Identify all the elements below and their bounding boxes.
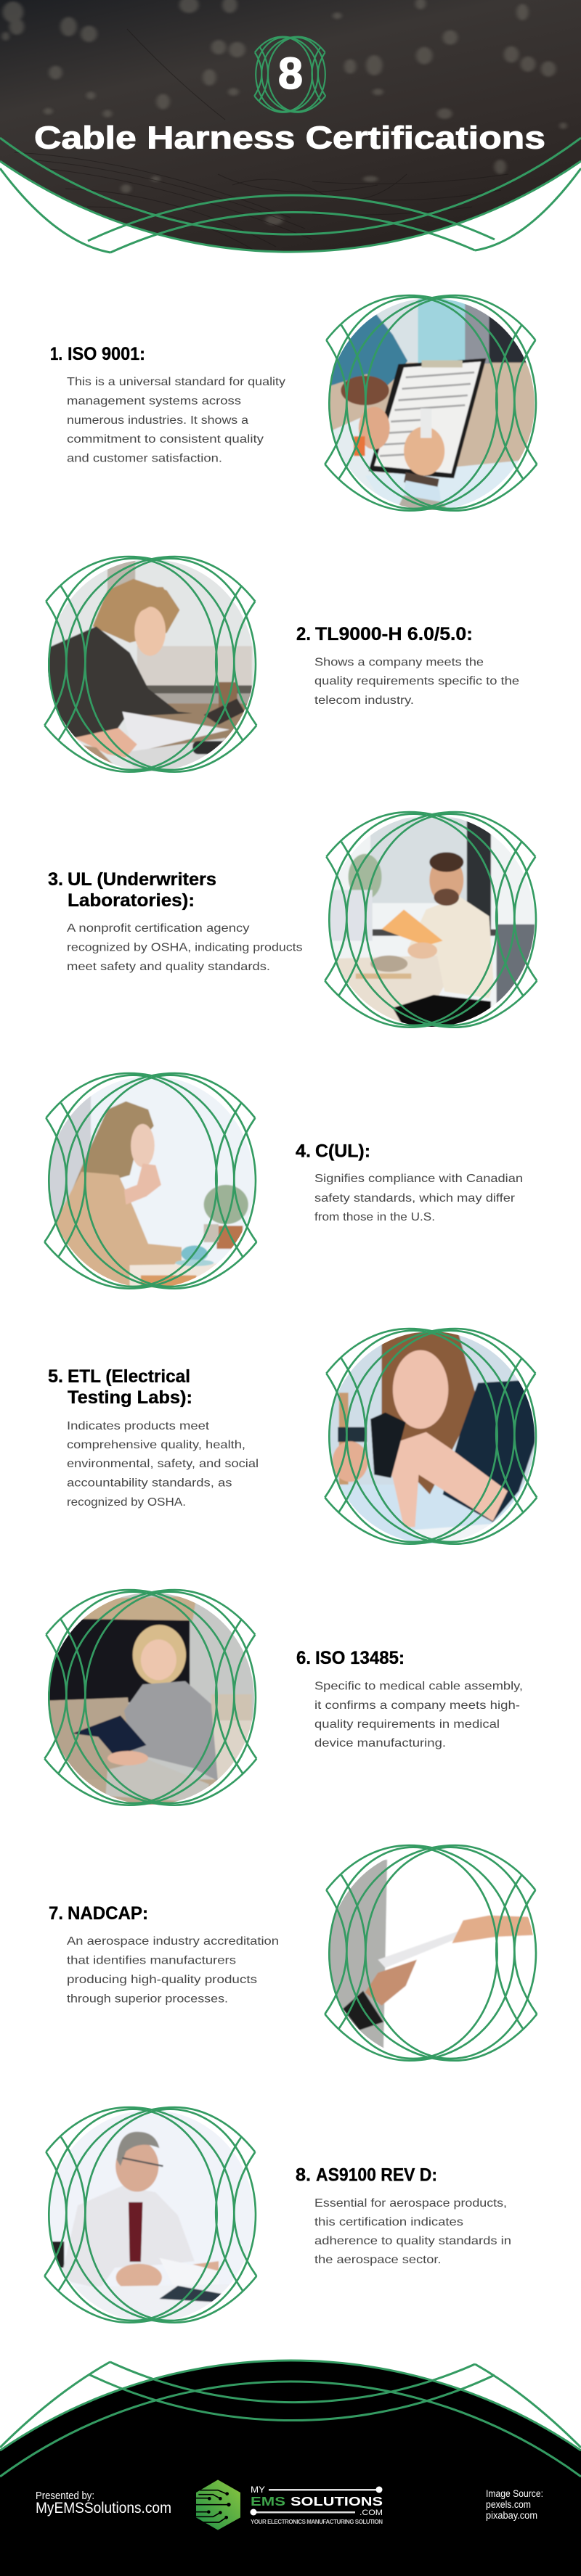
heading: 1. <box>50 344 62 364</box>
image source: pexels.com <box>486 2499 531 2510</box>
heading: 8. <box>296 2165 311 2186</box>
title number: 8 <box>278 49 303 98</box>
heading: Laboratories): <box>68 890 195 911</box>
text block: Indicates products meet <box>67 1420 210 1432</box>
text block: numerous industries. It shows a <box>67 414 248 427</box>
text block <box>67 376 285 464</box>
text block: telecom industry. <box>314 694 414 707</box>
photo: hands passing document <box>328 1859 533 2048</box>
panel: footer <box>0 2360 581 2576</box>
icon: green motif <box>44 1073 256 1289</box>
heading: 4. <box>296 1141 311 1162</box>
text block <box>314 1173 523 1223</box>
presented by <box>36 2490 171 2516</box>
presented by: Presented by: <box>36 2490 94 2502</box>
logo wordmark: MY <box>251 2485 265 2495</box>
text block: accountability standards, as <box>67 1477 232 1489</box>
text block: quality requirements specific to the <box>314 676 519 688</box>
icon: green motif <box>44 2107 256 2323</box>
footer black arc background <box>0 2360 581 2576</box>
text block: the aerospace sector. <box>314 2254 442 2266</box>
icon: green motif <box>325 1329 537 1544</box>
text block: Signifies compliance with Canadian <box>314 1173 523 1185</box>
heading: UL (Underwriters <box>68 869 216 890</box>
text block: safety standards, which may differ <box>314 1192 516 1205</box>
text block <box>67 922 302 973</box>
text block: producing high-quality products <box>67 1974 257 1986</box>
header green arcs <box>0 138 581 253</box>
icon: green motif <box>44 557 256 772</box>
icon: header motif <box>254 37 325 112</box>
text block: through superior processes. <box>67 1993 228 2006</box>
panel: item 7 NADCAP <box>49 1842 541 2071</box>
photo: woman thinking at desk <box>48 1077 254 1288</box>
logo <box>196 2479 383 2530</box>
text block: Shows a company meets the <box>314 656 484 669</box>
text block <box>67 1420 259 1509</box>
heading: C(UL): <box>315 1141 370 1162</box>
image source: pixabay.com <box>486 2510 537 2521</box>
presented by: MyEMSSolutions.com <box>36 2500 171 2516</box>
heading: Testing Labs): <box>68 1387 192 1408</box>
text block: device manufacturing. <box>314 1737 446 1750</box>
panel: item 2 TL9000 <box>41 551 519 780</box>
panel: item 8 AS9100 <box>41 2104 511 2333</box>
panel: item 5 ETL <box>48 1324 541 1554</box>
heading: ISO 13485: <box>315 1648 405 1668</box>
text block: management systems across <box>67 395 241 408</box>
text block: this certification indicates <box>314 2216 463 2228</box>
heading: ETL (Electrical <box>68 1366 190 1387</box>
text block: it confirms a company meets high- <box>314 1699 520 1712</box>
panel: header <box>0 0 581 261</box>
logo wordmark: EMS <box>251 2494 285 2509</box>
heading: 2. <box>296 624 311 644</box>
text block <box>314 2197 511 2266</box>
heading: ISO 9001: <box>68 344 145 364</box>
logo wordmark <box>250 2485 383 2525</box>
text block: recognized by OSHA. <box>67 1496 186 1509</box>
text block: Essential for aerospace products, <box>314 2197 507 2210</box>
text block: An aerospace industry accreditation <box>67 1935 279 1948</box>
icon: circuit hexagon <box>196 2479 240 2530</box>
image source: Image Source: <box>486 2488 543 2499</box>
icon: green motif <box>325 1845 537 2061</box>
heading: AS9100 REV D: <box>316 2165 437 2186</box>
text block: from those in the U.S. <box>314 1211 435 1223</box>
heading: 7. <box>49 1903 63 1924</box>
title: Cable Harness Certifications <box>34 120 545 155</box>
text block: Specific to medical cable assembly, <box>314 1681 523 1693</box>
heading: NADCAP: <box>68 1903 148 1924</box>
photo: clipboard and document <box>328 299 535 510</box>
text block: comprehensive quality, health, <box>67 1439 245 1451</box>
text block <box>314 1681 523 1750</box>
text block: that identifies manufacturers <box>67 1955 236 1966</box>
header photo background with bokeh <box>0 0 581 261</box>
heading <box>48 869 216 911</box>
panel: item 3 UL <box>48 808 541 1038</box>
panel: item 6 ISO 13485 <box>41 1586 523 1818</box>
text block: environmental, safety, and social <box>67 1458 259 1470</box>
text block: recognized by OSHA, indicating products <box>67 942 302 953</box>
text block: A nonprofit certification agency <box>67 922 250 935</box>
text block <box>67 1935 279 2006</box>
logo wordmark: SOLUTIONS <box>290 2494 383 2509</box>
text block: adherence to quality standards in <box>314 2235 511 2247</box>
photo: woman reading papers <box>48 560 254 771</box>
text block: quality requirements in medical <box>314 1718 500 1731</box>
footer green arcs <box>0 2360 581 2477</box>
text block: commitment to consistent quality <box>67 433 264 446</box>
icon: green motif <box>44 1590 256 1805</box>
text block: meet safety and quality standards. <box>67 961 270 973</box>
panel: item 1 ISO 9001 <box>50 289 541 518</box>
photo: man in tie reviewing papers <box>49 2111 254 2322</box>
heading: TL9000-H 6.0/5.0: <box>315 624 473 644</box>
text block: This is a universal standard for quality <box>67 376 285 388</box>
heading: 5. <box>48 1366 63 1387</box>
logo wordmark: .COM <box>359 2509 383 2517</box>
heading: 6. <box>296 1648 311 1668</box>
text block <box>314 656 519 707</box>
icon: green motif <box>325 812 537 1027</box>
image source <box>486 2488 543 2521</box>
photo: woman on sofa with book <box>48 1593 254 1805</box>
panel: item 4 C(UL) <box>41 1070 523 1300</box>
photo: woman inspecting device <box>328 1332 535 1543</box>
icon: green motif <box>325 295 537 511</box>
text block: and customer satisfaction. <box>67 453 222 464</box>
heading: 3. <box>48 869 63 890</box>
heading <box>48 1366 192 1408</box>
logo wordmark: YOUR ELECTRONICS MANUFACTURING SOLUTION <box>251 2519 383 2525</box>
photo: smiling man with book <box>330 816 535 1027</box>
